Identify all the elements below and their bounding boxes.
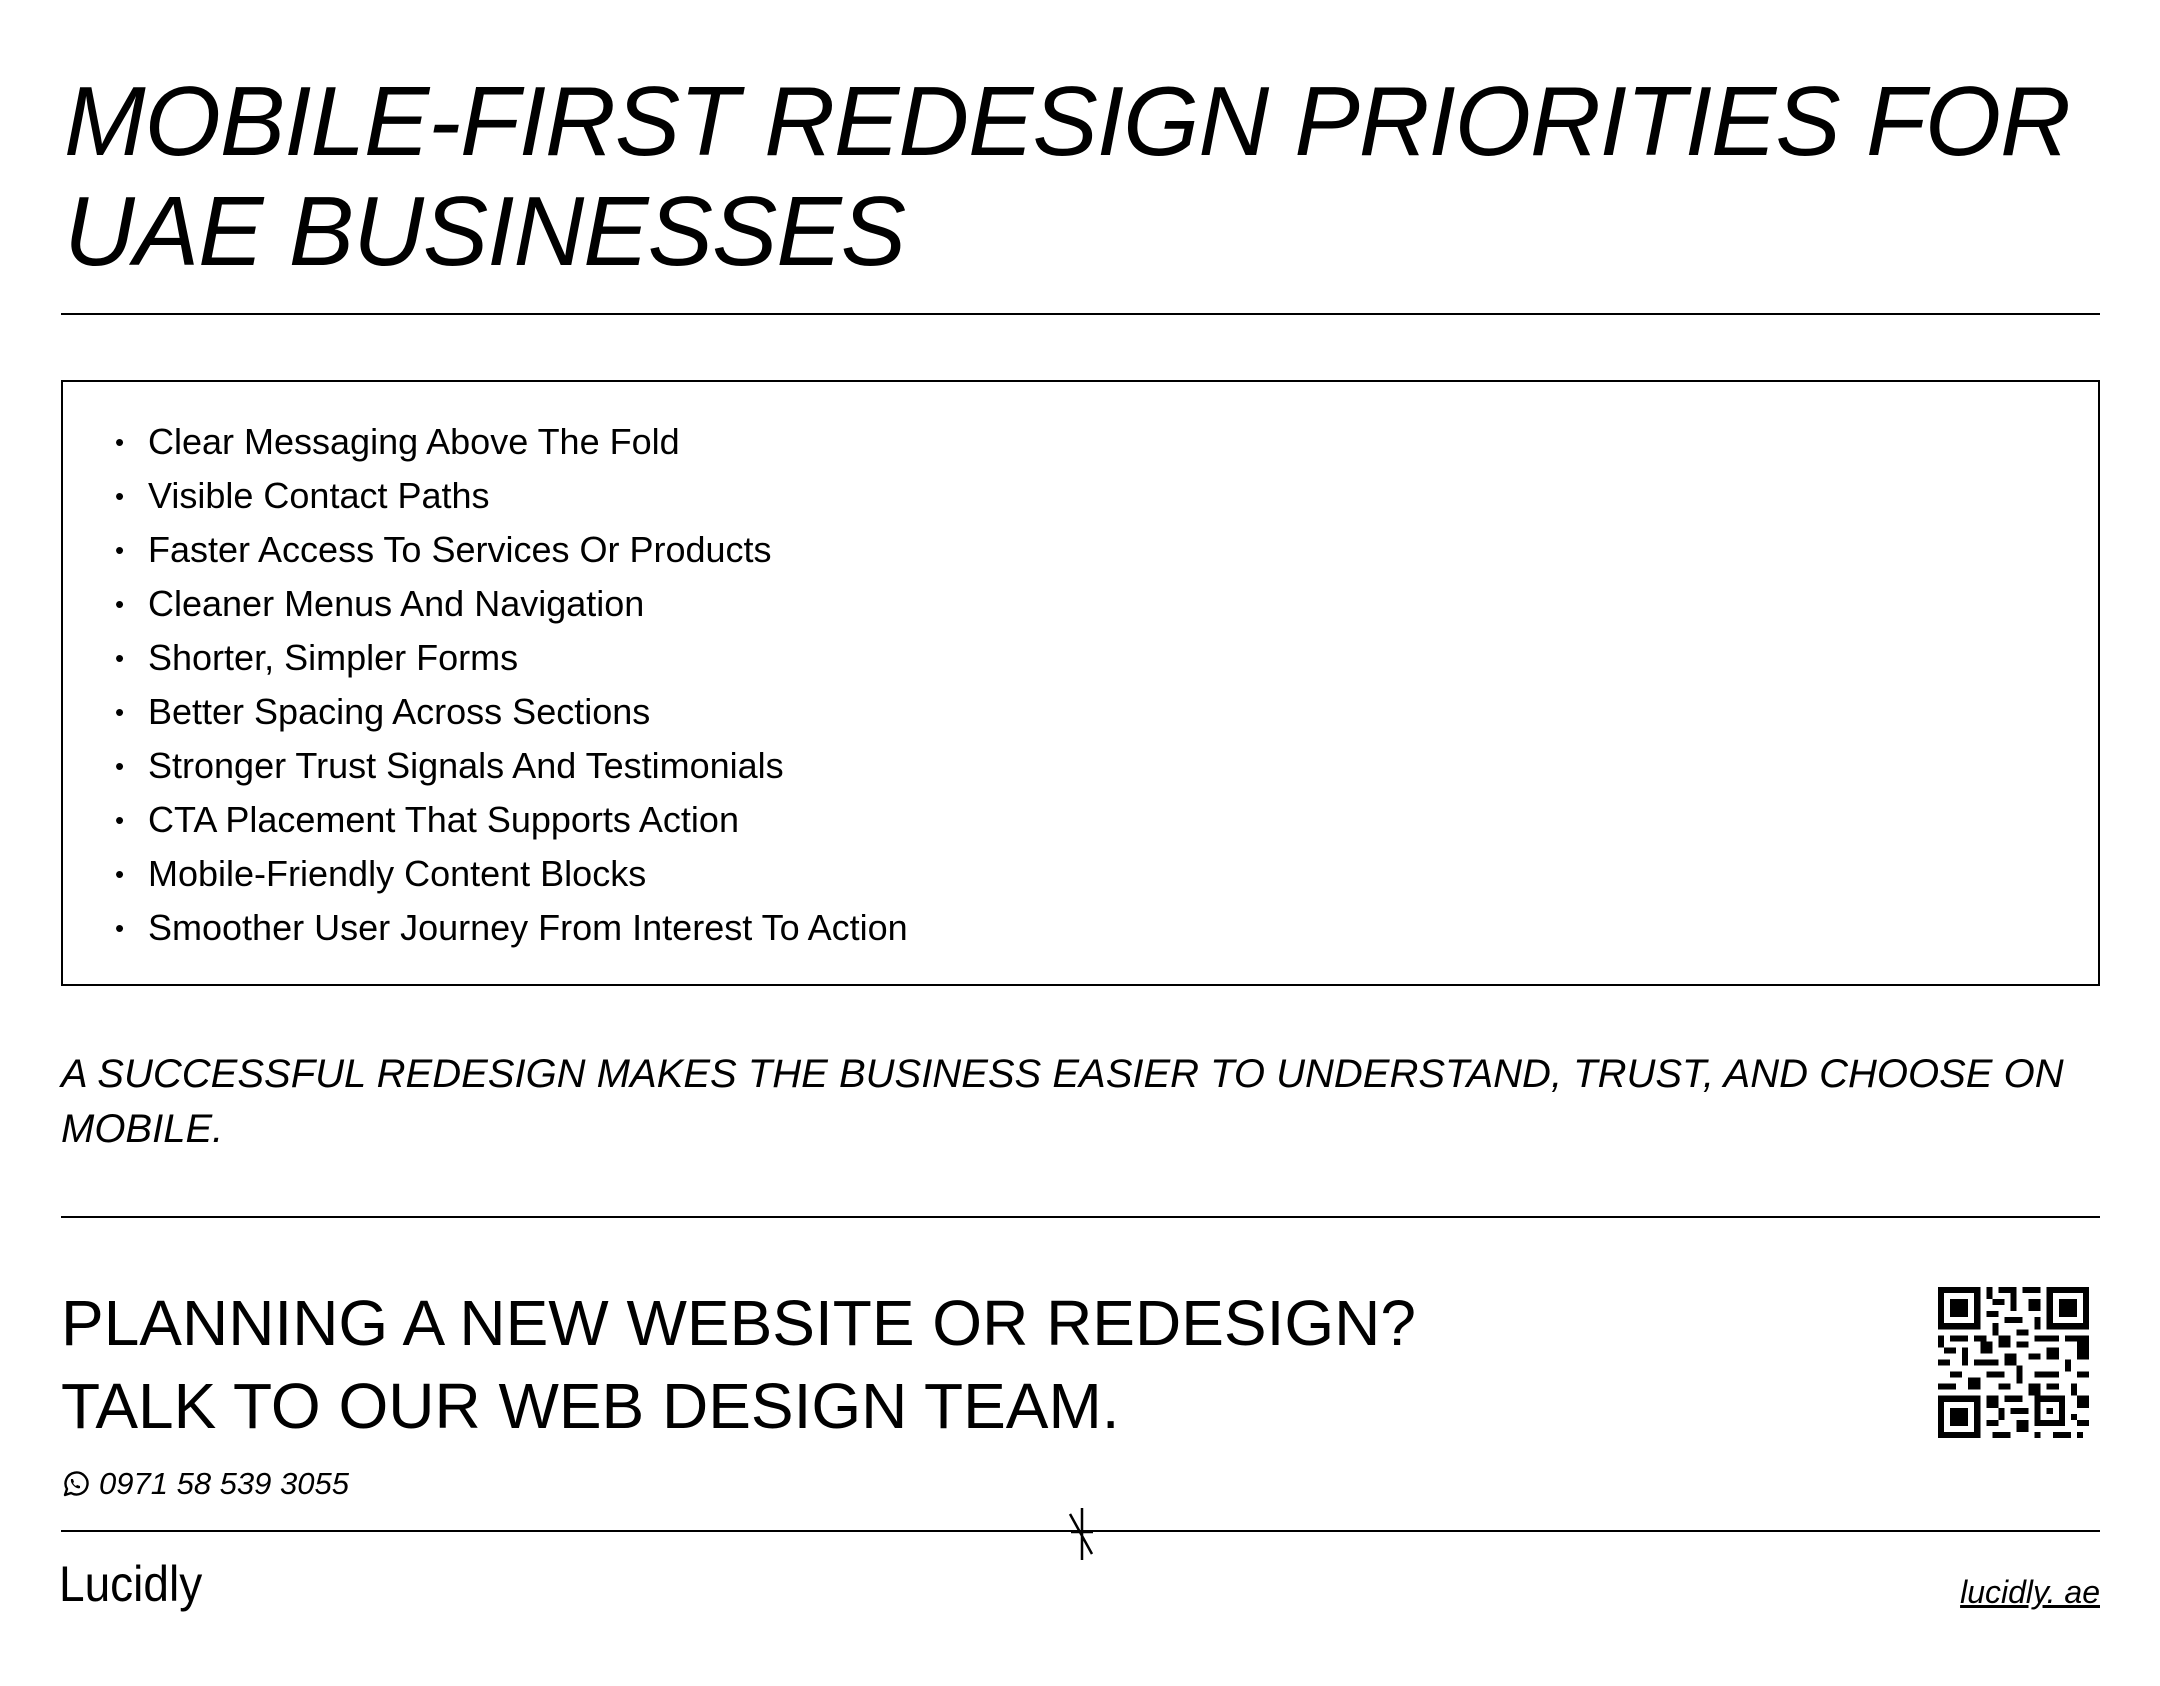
phone contact: 0971 58 539 3055 (99, 1466, 349, 1501)
QR code (1938, 1287, 2089, 1438)
panel: priorities list (61, 380, 2100, 986)
CTA heading: PLANNING A NEW WEBSITE OR REDESIGN? (61, 1287, 1416, 1359)
title: MOBILE-FIRST REDESIGN PRIORITIES FOR (64, 66, 2070, 176)
panel: priorities list: Visible Contact Paths (148, 475, 490, 516)
icon: sparkle cross (1068, 1508, 1093, 1560)
icon: whatsapp (64, 1471, 89, 1496)
panel: priorities list: Mobile-Friendly Content Blocks (148, 853, 646, 894)
panel: priorities list: Cleaner Menus And Navigation (148, 583, 644, 624)
panel: priorities list: Smoother User Journey From Interest To Action (148, 907, 908, 948)
panel: priorities list: Clear Messaging Above The Fold (148, 421, 680, 462)
statement text: A SUCCESSFUL REDESIGN MAKES THE BUSINESS EASIER TO UNDERSTAND, TRUST, AND CHOOSE ON MOBILE. (61, 1052, 2064, 1151)
CTA heading: TALK TO OUR WEB DESIGN TEAM. (61, 1370, 1120, 1442)
website link: lucidly. ae (1960, 1574, 2100, 1610)
title: UAE BUSINESSES (64, 176, 905, 286)
panel: priorities list: Faster Access To Services Or Products (148, 529, 772, 570)
panel: priorities list: Better Spacing Across Sections (148, 691, 650, 732)
panel: priorities list: Stronger Trust Signals And Testimonials (148, 745, 784, 786)
title (64, 66, 2070, 286)
panel: priorities list: CTA Placement That Supports Action (148, 799, 739, 840)
panel: priorities list: Shorter, Simpler Forms (148, 637, 518, 678)
logo: Lucidly (59, 1556, 202, 1612)
CTA heading (61, 1287, 1416, 1442)
